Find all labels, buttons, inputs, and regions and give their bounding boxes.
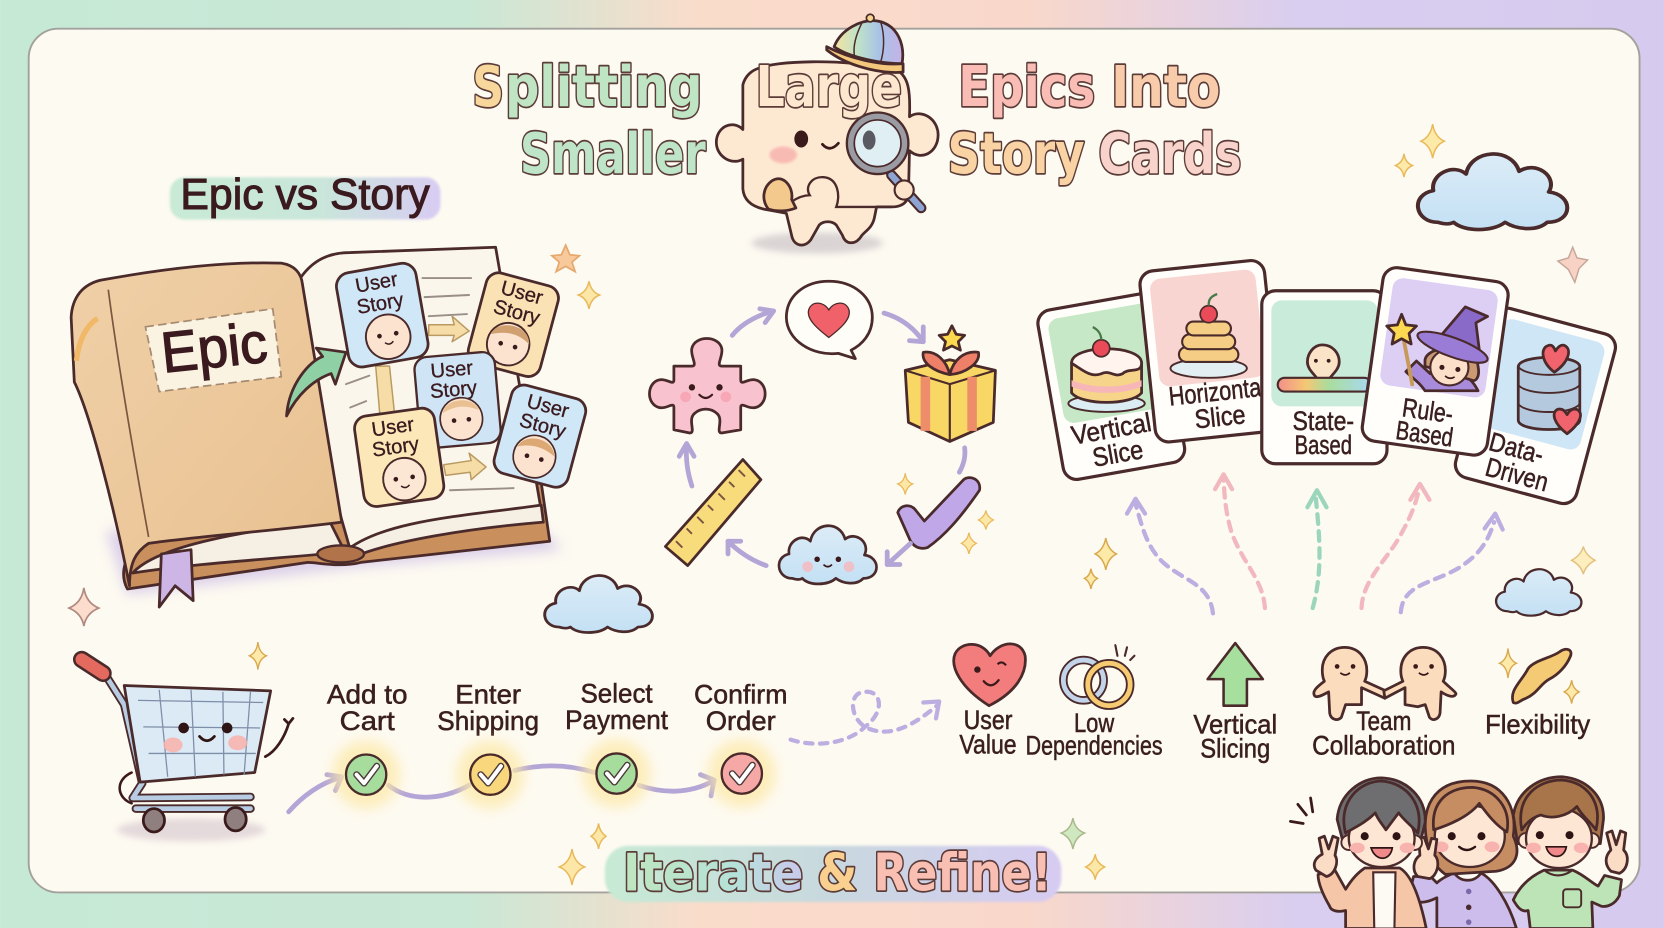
step checks bbox=[332, 740, 776, 809]
benefit: Vertical Slicing: Slicing bbox=[1200, 734, 1270, 764]
dashed arrow: rose bbox=[1362, 484, 1429, 608]
step labels: Payment bbox=[565, 705, 669, 735]
benefit: Low Dependencies: Dependencies bbox=[1026, 730, 1163, 760]
illustration: open epic book bbox=[71, 247, 589, 607]
card: user story 2 bbox=[465, 270, 561, 379]
magnifying glass bbox=[847, 112, 921, 208]
cloud lower right bbox=[1496, 569, 1581, 616]
card: Data-Driven: Data- bbox=[1486, 426, 1547, 470]
cycle: gift box bbox=[905, 326, 995, 441]
dashed arrow: green bbox=[1307, 490, 1327, 608]
card: user story 5: Story bbox=[517, 409, 569, 443]
card: user story 5: User bbox=[524, 391, 571, 423]
shopping cart character bbox=[71, 649, 293, 842]
left cover bbox=[71, 263, 342, 586]
checkout flow bbox=[289, 678, 787, 812]
star near book bbox=[552, 245, 579, 272]
cart handle bbox=[71, 649, 113, 684]
card: Vertical Slice: Slice bbox=[1090, 434, 1145, 473]
sparkle above cart bbox=[249, 642, 266, 670]
three waving kids bbox=[1290, 777, 1627, 928]
dashed arrow: purple 2 bbox=[1401, 514, 1503, 612]
flow arrows bbox=[289, 766, 714, 812]
banner: Iterate & Refine: Iterate bbox=[623, 843, 803, 903]
title bbox=[472, 55, 1242, 187]
step labels: Enter bbox=[455, 680, 521, 710]
cart face bbox=[163, 723, 247, 752]
title: plitting bbox=[505, 55, 703, 120]
sparkle near book bbox=[578, 281, 600, 309]
dashed arrow: purple 1 bbox=[1127, 499, 1213, 613]
title: Smaller bbox=[520, 122, 706, 187]
mascot: puzzle piece detective bbox=[716, 14, 938, 254]
benefit: Vertical Slicing: Vertical bbox=[1193, 709, 1277, 739]
spine line bbox=[108, 290, 149, 537]
card: user story 2: Story bbox=[491, 296, 543, 330]
cycle arrow: puzzle to bubble bbox=[732, 309, 774, 335]
book shadow bbox=[106, 520, 562, 594]
mascot hand bbox=[764, 179, 796, 211]
kid 3: green sweater bbox=[1513, 777, 1627, 928]
title: Large bbox=[756, 55, 902, 120]
benefit: Low Dependencies: Low bbox=[1074, 708, 1115, 738]
benefit: Team Collaboration bbox=[1312, 647, 1456, 760]
sparkles near dashed arrows bbox=[1085, 538, 1595, 589]
card: Vertical Slice: Vertical bbox=[1069, 407, 1154, 451]
book label: Epic: Epic bbox=[158, 311, 270, 386]
cart frame bbox=[106, 676, 250, 809]
dotted loop arrow bbox=[791, 692, 939, 744]
kid 1: peach jacket bbox=[1314, 778, 1426, 928]
mascot eye and smile bbox=[769, 131, 838, 163]
page stack bbox=[133, 520, 345, 573]
bookmark bbox=[159, 550, 193, 607]
cycle: pink puzzle piece bbox=[649, 339, 765, 433]
benefit: User Value: Value bbox=[959, 729, 1017, 759]
star right bbox=[1558, 247, 1588, 282]
benefits row bbox=[954, 643, 1591, 764]
card: user story 3 bbox=[413, 351, 502, 449]
banner: Iterate & Refine bbox=[605, 843, 1061, 903]
card: Rule-Based: Based bbox=[1394, 415, 1455, 453]
card: Vertical Slice bbox=[1036, 291, 1187, 482]
cycle: purple check mark bbox=[898, 478, 980, 548]
step labels: Order bbox=[706, 706, 776, 736]
banner: Iterate & Refine: Refine! bbox=[873, 843, 1052, 903]
card: State-Based bbox=[1262, 291, 1387, 464]
card: user story 3: User bbox=[430, 357, 474, 383]
step labels: Select bbox=[581, 678, 653, 708]
card: user story 2: User bbox=[498, 277, 545, 309]
slicing strategy cards bbox=[1036, 259, 1619, 507]
cycle arrow: check to cloud bbox=[887, 543, 911, 565]
sparkles around banner bbox=[559, 818, 1105, 885]
card: user story 5 bbox=[491, 382, 589, 490]
card: Horizontal Slice: Slice bbox=[1193, 399, 1247, 434]
yellow flow arrows bbox=[376, 316, 486, 480]
dashed arrow: pink bbox=[1215, 474, 1265, 608]
step labels: Add to bbox=[327, 680, 408, 710]
cloud lower centre bbox=[545, 576, 652, 633]
benefit: User Value: User bbox=[964, 705, 1013, 735]
benefit: Team Collaboration: Team bbox=[1356, 706, 1411, 736]
banner: Iterate & Refine: & bbox=[817, 843, 857, 903]
card: Rule-Based bbox=[1360, 266, 1510, 458]
step labels: Confirm bbox=[694, 680, 787, 710]
sparkles around check bbox=[898, 473, 993, 554]
back cover bbox=[124, 483, 550, 589]
step labels: Shipping bbox=[437, 706, 539, 736]
dashed arrows to cards bbox=[1127, 474, 1503, 613]
cart basket bbox=[124, 686, 271, 782]
title: Story bbox=[948, 122, 1085, 187]
benefit: Flexibility bbox=[1485, 648, 1591, 739]
right page bbox=[300, 247, 541, 550]
cycle arrow: gift to check bbox=[959, 448, 965, 472]
title: Epics bbox=[958, 55, 1095, 120]
cloud top right bbox=[1418, 154, 1567, 230]
card: user story 4 bbox=[353, 407, 445, 508]
text lines on page bbox=[346, 278, 514, 490]
card: user story 1: Story bbox=[355, 289, 406, 319]
card: Data-Driven bbox=[1452, 305, 1619, 507]
sparkle lower left bbox=[69, 588, 99, 626]
cycle arrow: ruler to puzzle bbox=[679, 444, 694, 486]
benefit: Vertical Slicing bbox=[1193, 643, 1277, 764]
cart wheels bbox=[143, 808, 246, 832]
benefit: Flexibility: Flexibility bbox=[1485, 709, 1591, 739]
title: Cards bbox=[1098, 122, 1242, 187]
green arrow into stories bbox=[287, 348, 346, 416]
card: Rule-Based: Rule- bbox=[1400, 392, 1455, 429]
card: State-Based: Based bbox=[1295, 430, 1352, 460]
cycle arrow: cloud to ruler bbox=[728, 541, 766, 566]
title: Into bbox=[1111, 55, 1220, 120]
cycle arrow: bubble to gift bbox=[884, 313, 923, 342]
card: user story 4: Story bbox=[371, 433, 421, 462]
benefit: Low Dependencies bbox=[1026, 645, 1163, 760]
exclamation lines bbox=[1290, 798, 1313, 823]
card: user story 1 bbox=[334, 261, 430, 369]
cart waving arm bbox=[265, 718, 293, 757]
step labels bbox=[327, 678, 787, 736]
benefit: Team Collaboration: Collaboration bbox=[1312, 730, 1455, 760]
card: user story 1: User bbox=[354, 269, 400, 298]
card: Horizontal Slice bbox=[1139, 259, 1281, 443]
card: user story 4: User bbox=[370, 414, 416, 441]
card: user story 3: Story bbox=[429, 377, 479, 403]
cycle diagram bbox=[649, 281, 995, 584]
clasp bbox=[317, 545, 364, 562]
title: S bbox=[472, 55, 504, 120]
card: Data-Driven: Driven bbox=[1482, 452, 1552, 497]
benefit: User Value bbox=[954, 644, 1025, 759]
card: State-Based: State- bbox=[1293, 406, 1354, 436]
kid 2: lavender dress bbox=[1412, 781, 1517, 928]
cycle: cloud face bbox=[779, 526, 877, 584]
sparkles top right bbox=[1395, 124, 1444, 177]
card: Horizontal Slice: Horizontal bbox=[1167, 372, 1267, 412]
cycle: ruler bbox=[665, 459, 761, 566]
heading: Epic vs Story: Epic vs Story bbox=[180, 171, 430, 219]
detective hat bbox=[827, 14, 903, 72]
cycle: speech bubble heart bbox=[786, 281, 872, 359]
step labels: Cart bbox=[340, 706, 395, 736]
